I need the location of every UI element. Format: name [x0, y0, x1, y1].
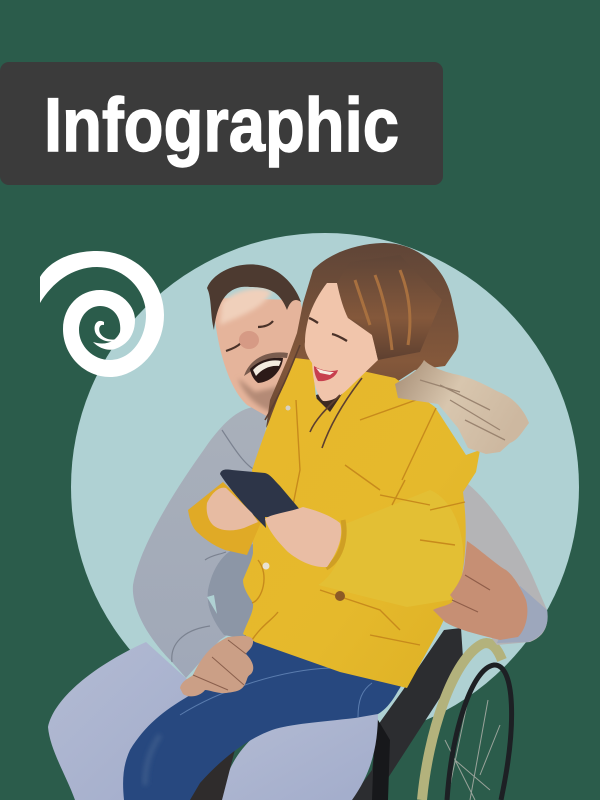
sleeve cuff	[497, 586, 548, 643]
wheelchair frame	[372, 715, 390, 800]
face	[213, 298, 312, 418]
nose shadow	[239, 331, 259, 349]
man: head	[207, 264, 312, 418]
wheel spokes	[445, 690, 500, 800]
hoodie right arm	[430, 478, 547, 645]
lower sleeve highlight	[318, 490, 463, 607]
wheelchair back panel	[350, 628, 463, 800]
girl: fur hood	[395, 360, 529, 454]
title bar	[0, 62, 443, 185]
left sleeve	[188, 482, 262, 555]
girl: yellow jacket	[188, 358, 480, 688]
jeans fade	[145, 735, 160, 785]
hair strands	[265, 345, 362, 448]
fringe	[337, 255, 442, 360]
hair	[207, 264, 301, 330]
hoodie torso	[208, 544, 275, 645]
forehead highlight	[220, 288, 272, 325]
man: legs	[48, 642, 378, 800]
jacket creases	[252, 395, 465, 645]
girl: head	[265, 255, 442, 448]
girl: right hand	[265, 507, 341, 567]
hand rim	[447, 665, 512, 800]
man: hoodie and arms	[133, 407, 548, 678]
jacket body	[243, 358, 480, 688]
hood folds	[172, 430, 255, 662]
man: hand on jacket	[433, 541, 527, 640]
teeth	[253, 360, 281, 376]
jeans seam	[180, 668, 372, 717]
teeth	[316, 368, 334, 375]
collar snaps	[286, 406, 290, 410]
gap under arm	[207, 595, 217, 614]
jeans	[123, 630, 405, 800]
fur texture	[420, 380, 505, 440]
title text: Infographic	[44, 83, 399, 168]
eyes	[309, 318, 347, 341]
mouth	[250, 358, 283, 383]
stubble	[238, 378, 285, 412]
girl: back hair	[266, 243, 459, 440]
tyre	[422, 643, 502, 800]
face	[305, 283, 378, 401]
pocket button	[335, 591, 345, 601]
hair highlights	[355, 270, 410, 350]
illustration: father and daughter in wheelchair	[48, 243, 548, 800]
hoodie left arm	[133, 407, 268, 678]
snap button	[262, 562, 270, 570]
spiral centre curl	[95, 321, 122, 341]
finger lines	[452, 575, 490, 612]
wheelchair	[350, 628, 512, 800]
man: hand on knee	[180, 636, 253, 696]
eyes	[226, 321, 273, 351]
sleeve cuff	[326, 520, 344, 568]
icon: white spiral logo	[40, 251, 164, 377]
mouth	[314, 366, 338, 381]
phone	[220, 469, 307, 528]
pale blue circle	[71, 233, 579, 741]
girl: neck shadow	[316, 385, 350, 430]
moustache	[244, 352, 288, 376]
girl: left hand	[207, 488, 258, 530]
knuckle lines	[193, 640, 246, 690]
